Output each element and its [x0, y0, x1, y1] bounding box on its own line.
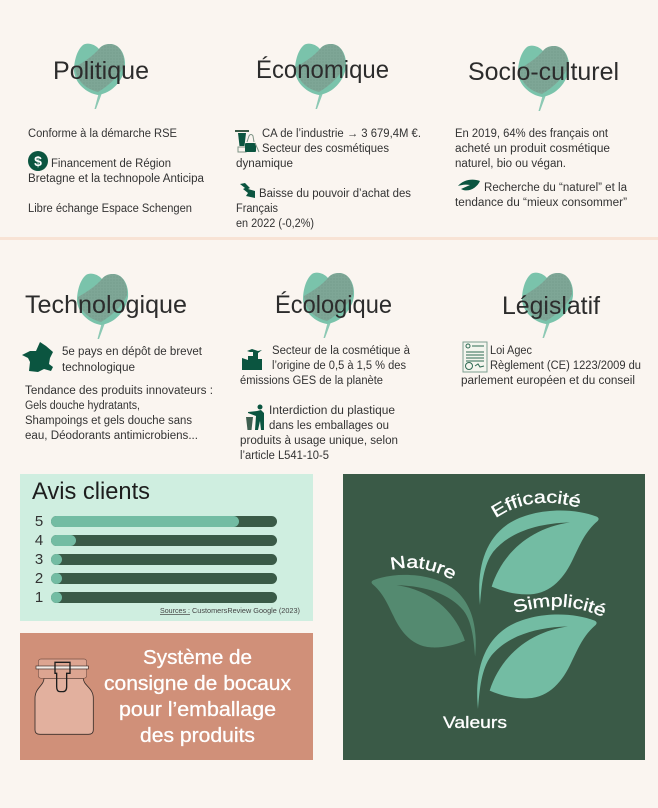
text: législatif content: Loi Agec — [490, 345, 532, 357]
text: politique content: Bretagne et la technopole Anticipa — [28, 173, 205, 185]
illustration: three leaves — [372, 490, 606, 708]
icon: legal document — [463, 342, 487, 372]
bar chart: ratings — [35, 513, 277, 606]
text: écologique content: émissions GES de la planète — [240, 375, 383, 387]
text: socio-culturel content: tendance du “mieux consommer” — [455, 197, 627, 209]
bar chart: ratings: 2 — [35, 570, 43, 587]
panel: socio-culturel — [455, 46, 628, 209]
panel: politique — [28, 44, 205, 215]
text: socio-culturel content: naturel, bio ou végan. — [455, 158, 566, 170]
text: technologique content: Tendance des produits innovateurs : — [25, 385, 213, 397]
heading: politique: Politique — [53, 57, 149, 85]
icon: cosmetics products — [235, 130, 259, 152]
text: technologique content — [25, 346, 213, 442]
bar chart: ratings: 3 — [35, 551, 43, 568]
text: économique content: dynamique — [236, 158, 293, 170]
text: socio-culturel content: Recherche du “naturel” et la — [484, 182, 628, 194]
bar chart: ratings: 4 — [35, 532, 43, 549]
text: législatif content: Règlement (CE) 1223/2009 du — [490, 360, 641, 372]
leaf decoration — [74, 44, 125, 109]
leaf decoration — [522, 273, 573, 338]
leaf decoration — [518, 46, 569, 111]
source note: Sources : — [160, 608, 190, 615]
text: écologique content: Interdiction du plastique — [269, 405, 395, 417]
text: économique content: en 2022 (-0,2%) — [236, 218, 314, 230]
text: politique content: Conforme à la démarche RSE — [28, 128, 177, 140]
text: technologique content: Gels douche hydratants, — [25, 400, 140, 412]
text: écologique content: produits à usage unique, selon — [240, 435, 398, 447]
panel: économique — [235, 44, 421, 230]
text: consigne — [104, 647, 291, 747]
text: consigne: des produits — [140, 725, 255, 747]
heading: technologique: Technologique — [25, 291, 187, 319]
text: socio-culturel content: En 2019, 64% des français ont — [455, 128, 609, 140]
bar chart: ratings: 1 — [35, 589, 43, 606]
panel: technologique — [22, 274, 213, 442]
text: législatif content: parlement européen et du conseil — [461, 375, 635, 387]
text: technologique content: Shampoings et gels douche sans — [25, 415, 192, 427]
text: écologique content: l’article L541-10-5 — [240, 450, 329, 462]
bar chart: ratings: 5 — [35, 513, 43, 530]
text: politique content — [28, 128, 205, 215]
icon: glass jar — [35, 659, 93, 734]
text: technologique content: technologique — [62, 362, 135, 374]
text: socio-culturel content: acheté un produit cosmétique — [455, 143, 610, 155]
illustration: three leaves: Efficacité — [490, 490, 580, 518]
illustration: three leaves: Nature — [390, 556, 455, 578]
icon: person throwing in a bin — [246, 404, 264, 430]
leaf decoration — [77, 274, 128, 339]
text: écologique content: Secteur de la cosmétique à — [272, 345, 411, 357]
panel: avis clients — [20, 474, 313, 621]
text: économique content — [236, 128, 421, 230]
text: écologique content: dans les emballages ou — [269, 420, 389, 432]
leaf decoration — [303, 273, 354, 338]
text: consigne: pour l’emballage — [119, 699, 276, 721]
icon: falling arrow — [240, 183, 255, 198]
icon: dollar coin: $ — [34, 153, 42, 169]
source note: CustomersReview Google (2023) — [192, 608, 300, 615]
text: économique content: Français — [236, 203, 278, 215]
heading: législatif: Législatif — [502, 292, 600, 320]
text: législatif content — [461, 345, 641, 387]
heading: socio-culturel: Socio-culturel — [468, 58, 619, 86]
text: écologique content — [240, 345, 411, 462]
text: technologique content: eau, Déodorants antimicrobiens... — [25, 430, 198, 442]
heading: économique: Économique — [256, 55, 389, 84]
panel: consigne de bocaux — [20, 633, 313, 760]
text: consigne: Système de — [143, 647, 252, 669]
text: socio-culturel content — [455, 128, 628, 209]
text: écologique content: l’origine de 0,5 à 1,5 % des — [272, 360, 406, 372]
text: consigne: consigne de bocaux — [104, 673, 291, 695]
panel background — [343, 474, 645, 760]
text: politique content: Financement de Région — [51, 158, 171, 170]
heading: écologique: Écologique — [275, 290, 392, 319]
text: économique content: Secteur des cosmétiques — [262, 143, 389, 155]
text: économique content: CA de l’industrie → 3 679,4M €. — [262, 128, 421, 140]
icon: dollar coin — [28, 151, 48, 171]
leaf decoration — [295, 44, 346, 109]
panel background — [20, 474, 313, 621]
panel: écologique — [240, 273, 411, 462]
icon: map of France — [22, 342, 53, 372]
icon: polluting factory — [242, 349, 262, 370]
text: technologique content: 5e pays en dépôt de brevet — [62, 346, 203, 358]
text: économique content: Baisse du pouvoir d’achat des — [259, 188, 411, 200]
panel: valeurs — [343, 474, 645, 760]
icon: leaf — [458, 180, 480, 190]
panel: législatif — [461, 273, 641, 387]
label: valeurs: Valeurs — [443, 713, 507, 732]
panel background — [20, 633, 313, 760]
heading: avis clients: Avis clients — [32, 478, 150, 505]
illustration: three leaves: Simplicité — [514, 594, 606, 616]
text: politique content: Libre échange Espace Schengen — [28, 203, 192, 215]
